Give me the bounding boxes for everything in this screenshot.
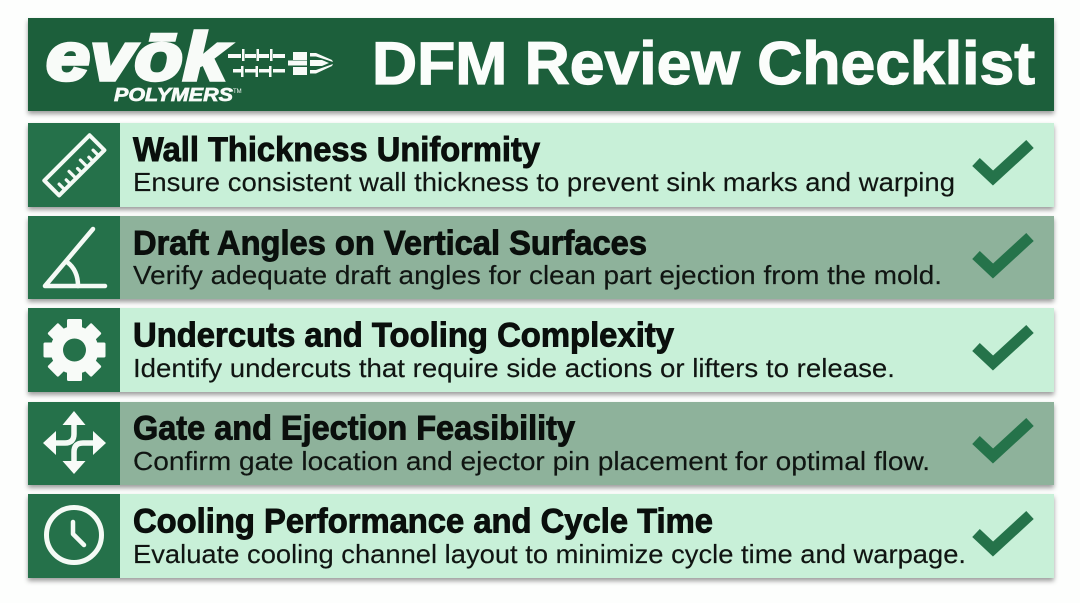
heading: Gate and Ejection Feasibility <box>133 410 575 448</box>
description: Identify undercuts that require side actions or lifters to release. <box>133 353 895 383</box>
description: Verify adequate draft angles for clean part ejection from the mold. <box>133 260 942 290</box>
description: Evaluate cooling channel layout to minimize cycle time and warpage. <box>133 539 966 569</box>
icon: branching arrows <box>43 411 106 474</box>
logo: evok polymers <box>46 19 333 105</box>
title: DFM Review Checklist <box>372 30 1035 97</box>
panel: wall thickness <box>28 123 1054 207</box>
icon: ruler <box>44 135 104 195</box>
icon: gear <box>44 319 106 381</box>
description: Ensure consistent wall thickness to prevent sink marks and warping <box>133 167 955 197</box>
icon: check mark <box>976 144 1030 178</box>
panel: undercuts <box>28 308 1054 392</box>
description: Confirm gate location and ejector pin placement for optimal flow. <box>133 446 930 476</box>
panel: draft angles <box>28 216 1054 299</box>
heading: Undercuts and Tooling Complexity <box>133 316 674 354</box>
panel: gate and ejection <box>28 402 1054 485</box>
logo: evok polymers: POLYMERS <box>114 85 233 105</box>
icon: clock <box>46 508 102 562</box>
heading: Wall Thickness Uniformity <box>133 131 540 169</box>
icon: check mark <box>976 422 1030 456</box>
icon: angle <box>45 229 105 286</box>
logo: evok polymers: TM <box>233 89 242 95</box>
heading: Draft Angles on Vertical Surfaces <box>133 224 647 262</box>
icon: check mark <box>976 515 1030 549</box>
logo: evok polymers: evōk <box>46 19 231 95</box>
icon: check mark <box>976 237 1030 271</box>
header banner <box>28 18 1054 111</box>
heading: Cooling Performance and Cycle Time <box>133 502 713 540</box>
icon: check mark <box>976 329 1030 363</box>
panel: cooling performance <box>28 494 1054 578</box>
